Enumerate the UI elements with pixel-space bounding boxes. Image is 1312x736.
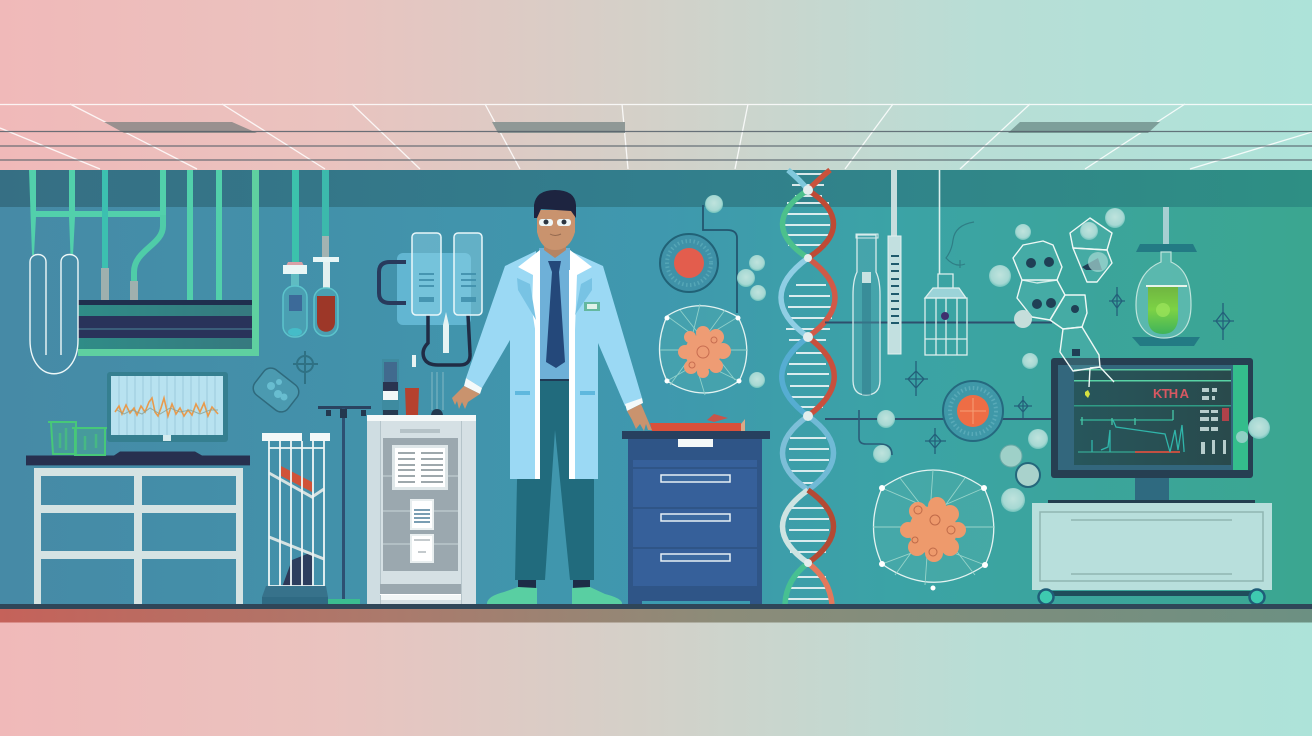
lapels [518, 250, 592, 335]
molecule dots [1026, 257, 1102, 356]
crossing knots [803, 185, 813, 567]
socks [518, 580, 590, 590]
pump bags [412, 233, 482, 315]
hanging cage [925, 170, 967, 355]
large paper [392, 445, 448, 490]
cable loop [423, 315, 470, 365]
rungs [785, 174, 832, 599]
molecular hexagon network [1013, 218, 1114, 387]
lower cell mesh right [873, 470, 995, 590]
tumour cluster [678, 326, 731, 378]
connection tubing [703, 205, 737, 313]
left hand [452, 386, 480, 409]
glasses and eyes [539, 219, 571, 226]
table top [26, 451, 250, 465]
crosshair icons right [905, 287, 1234, 454]
scientist figure [452, 190, 652, 604]
glass rod stand [432, 372, 443, 410]
right monitor [1051, 358, 1253, 500]
circular gauge [660, 234, 718, 292]
coat [466, 251, 642, 479]
traces [1078, 410, 1184, 452]
shoes [487, 587, 622, 604]
green frame [78, 170, 259, 356]
coat white placket [535, 270, 575, 479]
small paper bottom [410, 534, 434, 563]
drawer handles [661, 475, 730, 561]
curved pipe [134, 215, 163, 282]
green beakers [48, 422, 108, 455]
bubbles right [873, 208, 1270, 512]
gauge disc right [943, 381, 1003, 441]
pipe system and tank [29, 170, 259, 374]
left lab table [26, 422, 250, 605]
IV stand [318, 406, 371, 605]
right hand [627, 404, 652, 431]
ceiling vent left [104, 122, 257, 133]
pockets [515, 391, 530, 395]
green pipes [29, 170, 222, 300]
cabinet grey panel [383, 438, 458, 571]
neck [544, 235, 566, 258]
monitor controls [1200, 388, 1226, 454]
IV bag blue [283, 262, 307, 337]
ceiling vent centre [492, 122, 625, 133]
hanging IV bags [283, 170, 339, 337]
test tube [853, 234, 880, 395]
pump panel [397, 253, 471, 325]
teal pipe [102, 170, 108, 268]
small syringe [443, 312, 449, 353]
face [537, 210, 575, 250]
folding rack [262, 433, 330, 605]
hanging flask [1132, 207, 1200, 346]
DNA double helix [781, 170, 835, 604]
ceiling vent right [1008, 122, 1160, 133]
rack stripes [281, 466, 312, 492]
floor strip [0, 609, 1312, 622]
doodle sketch [946, 222, 974, 268]
left strands [781, 170, 808, 604]
IV bag red [313, 257, 339, 336]
right strands [808, 170, 835, 604]
trousers [515, 378, 594, 580]
hair [534, 190, 576, 218]
back wall [0, 170, 1312, 605]
grey filing cabinet [367, 415, 476, 605]
items on cabinet top [382, 355, 443, 415]
bubbles [705, 195, 766, 388]
red tray [650, 414, 745, 431]
tank layers [78, 300, 253, 349]
tie [546, 261, 565, 368]
small paper top [410, 499, 434, 530]
monitor readout: KTH A [1153, 386, 1190, 401]
small tubing right [859, 410, 892, 455]
badge [584, 302, 600, 311]
wall monitor with waveform [107, 372, 228, 442]
red cup [405, 388, 419, 415]
wall tag icon [250, 364, 302, 416]
table frame [34, 468, 243, 605]
hanging syringe strip [888, 170, 901, 354]
wheels [1038, 590, 1264, 604]
blue drawer cabinet [622, 414, 770, 604]
pump handle [379, 262, 406, 303]
cuffs [464, 378, 643, 411]
cell mesh [660, 304, 748, 395]
floor line [0, 604, 1312, 609]
ceiling grid [0, 104, 1312, 169]
monitor cabinet [1032, 500, 1272, 604]
IV pump device [379, 233, 482, 365]
U-shaped white tubes [30, 254, 78, 374]
tumour cluster large [900, 497, 966, 562]
pipe connectors [101, 268, 138, 300]
wall top band [0, 170, 1312, 207]
wall disc and cell, centre [660, 195, 766, 395]
shirt [539, 248, 570, 379]
connecting wall lines [825, 322, 1052, 419]
crosshair icon left [293, 351, 318, 384]
waveform line [115, 398, 218, 416]
